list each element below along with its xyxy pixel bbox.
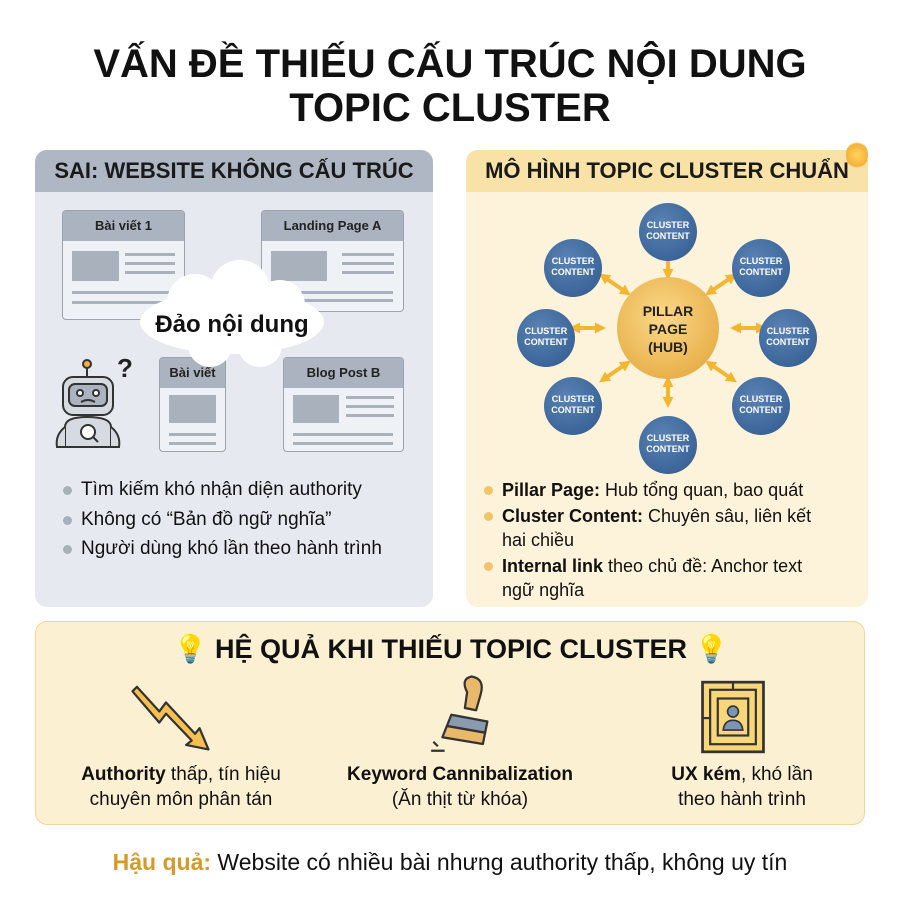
- card: bai viet 1: [62, 210, 185, 320]
- icon: stamp: [431, 675, 488, 752]
- icon: robot: [56, 355, 133, 448]
- nodes: cluster content: CONTENT: [766, 337, 810, 347]
- nodes: cluster content: CONTENT: [551, 405, 595, 415]
- text: authority: Authority thấp, tín hiệu: [81, 764, 281, 785]
- nodes: cluster content: CONTENT: [646, 231, 690, 241]
- list: model bullets: Cluster Content: Chuyên sâu, liên kết: [502, 506, 811, 526]
- nodes: cluster content: CONTENT: [646, 444, 690, 454]
- heading: consequences: 💡 HỆ QUẢ KHI THIẾU TOPIC CLUSTER 💡: [174, 634, 728, 664]
- text: authority: chuyên môn phân tán: [90, 789, 272, 810]
- nodes: cluster content: CLUSTER: [767, 326, 809, 336]
- nodes: cluster content: CLUSTER: [525, 326, 567, 336]
- heading: wrong: [35, 150, 433, 192]
- nodes: cluster content: CLUSTER: [647, 433, 689, 443]
- card: blog post B: Blog Post B: [307, 365, 380, 380]
- card: bai viet 1: Bài viết 1: [95, 218, 152, 233]
- chart: hub and spokes: PAGE: [649, 321, 687, 337]
- list: model bullets: [484, 480, 811, 600]
- icon: lightbulb top right: [846, 140, 868, 170]
- icon: falling arrow: [131, 686, 210, 750]
- text: authority: [81, 764, 281, 810]
- list: wrong bullets: Người dùng khó lần theo hành trình: [81, 538, 382, 559]
- heading: model: MÔ HÌNH TOPIC CLUSTER CHUẨN: [485, 158, 849, 183]
- card: bai viet: [159, 357, 226, 452]
- text: cannibalization: (Ăn thịt từ khóa): [392, 789, 528, 810]
- list: model bullets: Pillar Page: Hub tổng quan, bao quát: [502, 480, 803, 500]
- nodes: cluster content: CLUSTER: [552, 256, 594, 266]
- card: bai viet: Bài viết: [169, 365, 216, 380]
- nodes: cluster content: CLUSTER: [740, 256, 782, 266]
- list: model bullets: hai chiều: [502, 530, 574, 550]
- nodes: cluster content: CLUSTER: [552, 394, 594, 404]
- nodes: cluster content: CONTENT: [524, 337, 568, 347]
- list: model bullets: Internal link theo chủ đề: Anchor text: [502, 556, 802, 576]
- card: blog post B: [283, 357, 404, 452]
- text: cannibalization: Keyword Cannibalization: [347, 764, 573, 785]
- list: wrong bullets: Không có “Bản đồ ngữ nghĩa”: [81, 509, 331, 530]
- footer: consequence: Hậu quả: Website có nhiều bài nhưng authority thấp, không uy tín: [113, 849, 787, 875]
- list: wrong bullets: Tìm kiếm khó nhận diện authority: [81, 479, 362, 500]
- title: VẤN ĐỀ THIẾU CẤU TRÚC NỘI DUNG: [93, 42, 807, 86]
- callout: cloud: [140, 260, 324, 367]
- list: wrong bullets: [63, 479, 382, 559]
- icon: maze: [701, 680, 765, 754]
- callout: cloud: Đảo nội dung: [155, 311, 309, 338]
- title: [93, 41, 807, 130]
- nodes: cluster content: [517, 203, 817, 474]
- nodes: cluster content: CONTENT: [551, 267, 595, 277]
- heading: model: [466, 150, 868, 192]
- chart: hub and spokes: [572, 260, 762, 408]
- text: cannibalization: [347, 764, 573, 810]
- nodes: cluster content: CLUSTER: [647, 220, 689, 230]
- card: landing page A: Landing Page A: [284, 218, 381, 233]
- panel: consequences: [35, 621, 865, 825]
- chart: hub and spokes: (HUB): [648, 339, 688, 355]
- panel: wrong website: [35, 150, 433, 607]
- text: ux: [671, 764, 813, 810]
- heading: wrong: SAI: WEBSITE KHÔNG CẤU TRÚC: [54, 158, 414, 183]
- text: ux: UX kém, khó lần: [671, 764, 813, 785]
- card: landing page A: [261, 210, 404, 312]
- title: TOPIC CLUSTER: [289, 86, 611, 130]
- nodes: cluster content: CONTENT: [739, 267, 783, 277]
- text: ux: theo hành trình: [678, 789, 806, 810]
- nodes: cluster content: CONTENT: [739, 405, 783, 415]
- chart: hub and spokes: PILLAR: [643, 303, 693, 319]
- nodes: cluster content: CLUSTER: [740, 394, 782, 404]
- list: model bullets: ngữ nghĩa: [502, 580, 584, 600]
- panel: topic cluster model: [466, 150, 868, 607]
